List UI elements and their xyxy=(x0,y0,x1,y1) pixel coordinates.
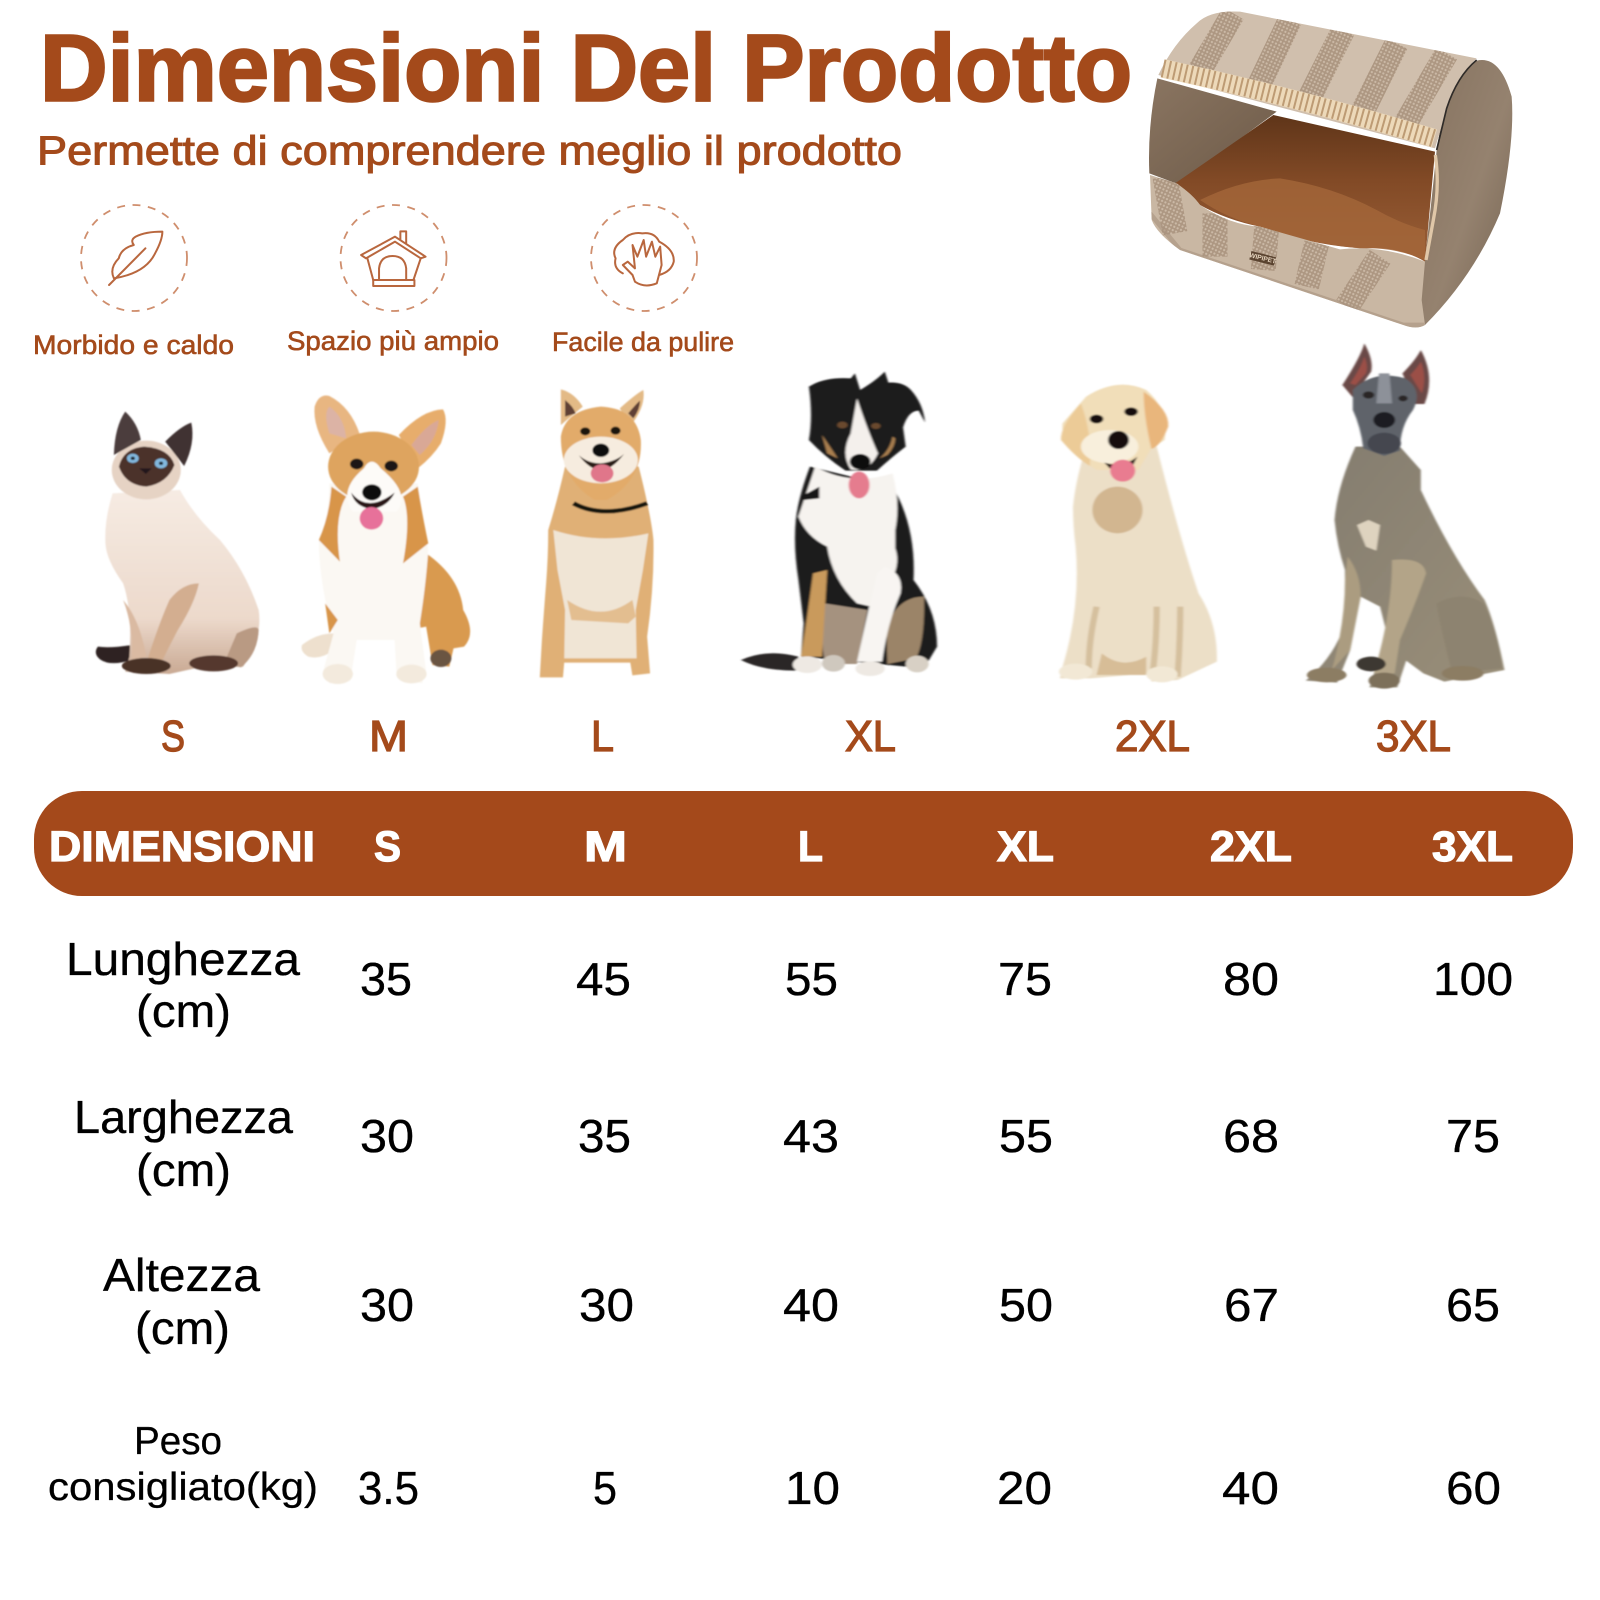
values: 20 xyxy=(997,1462,1052,1514)
size label 2XL: 2XL xyxy=(1115,712,1190,761)
header: M: M xyxy=(584,823,627,871)
bed cushion xyxy=(1175,115,1435,262)
icon: dashed circle xyxy=(340,205,446,311)
values xyxy=(358,1462,1501,1514)
values: 5 xyxy=(593,1462,617,1514)
values: 45 xyxy=(576,953,631,1005)
pet: great dane xyxy=(1306,343,1504,689)
table header xyxy=(34,791,1573,896)
bed piping xyxy=(1437,60,1477,150)
label: Morbido e caldo xyxy=(33,330,234,360)
pet: shiba inu xyxy=(540,389,654,677)
bed roof ribbed trim xyxy=(1163,68,1434,138)
icon: dashed circle xyxy=(591,205,697,311)
values: 55 xyxy=(999,1110,1053,1162)
values xyxy=(360,1279,1500,1331)
size label S: S xyxy=(161,712,185,761)
values: 55 xyxy=(785,953,838,1005)
bed cushion highlight xyxy=(1200,178,1425,260)
values: 68 xyxy=(1223,1110,1279,1162)
values: 35 xyxy=(360,953,412,1005)
icon: hand and foam xyxy=(614,233,674,285)
table row: lunghezza xyxy=(66,933,1513,1037)
row label: Larghezza xyxy=(74,1091,293,1143)
illustration: pets S M L xyxy=(96,389,654,684)
row label: Lunghezza xyxy=(66,933,300,985)
illustration: pet bed house xyxy=(1143,7,1512,333)
icon: leaf xyxy=(109,232,162,285)
feature: facile da pulire xyxy=(552,205,734,357)
bed front lip xyxy=(1150,175,1425,328)
header: L: L xyxy=(798,823,823,871)
header: dimensioni: DIMENSIONI xyxy=(49,823,315,871)
icon: dashed circle xyxy=(81,205,187,311)
values: 75 xyxy=(998,953,1052,1005)
subtitle: Permette di comprendere meglio il prodotto xyxy=(37,128,902,174)
row label: (cm) xyxy=(135,1302,230,1354)
header: XL: XL xyxy=(997,823,1054,871)
values: 43 xyxy=(783,1110,839,1162)
title: Dimensioni Del Prodotto xyxy=(40,16,1132,122)
icon: dog house xyxy=(361,231,426,286)
values: 35 xyxy=(578,1110,631,1162)
values: 65 xyxy=(1446,1279,1500,1331)
size label M: M xyxy=(369,712,408,761)
illustration: pets XL 2XL 3XL xyxy=(741,343,1504,689)
pet: golden retriever xyxy=(1059,385,1217,682)
values: 100 xyxy=(1433,953,1513,1005)
values: 40 xyxy=(1222,1462,1279,1514)
values: 10 xyxy=(785,1462,840,1514)
label: Facile da pulire xyxy=(552,327,734,357)
values: 30 xyxy=(579,1279,634,1331)
table row: peso consigliato xyxy=(48,1420,1501,1514)
bed side panel xyxy=(1420,60,1512,325)
row label: Peso xyxy=(134,1420,222,1463)
header: 2XL: 2XL xyxy=(1210,823,1292,871)
bed roof xyxy=(1157,7,1483,153)
row label: consigliato(kg) xyxy=(48,1466,318,1509)
values: 80 xyxy=(1223,953,1279,1005)
feature: spazio più ampio xyxy=(287,205,499,356)
feature: morbido e caldo xyxy=(33,205,234,360)
values: 30 xyxy=(360,1110,414,1162)
values xyxy=(360,1110,1500,1162)
bed interior wall xyxy=(1149,78,1277,183)
values: 30 xyxy=(360,1279,414,1331)
size label 3XL: 3XL xyxy=(1376,712,1451,761)
row label: (cm) xyxy=(136,1144,231,1196)
pet: corgi xyxy=(302,396,470,684)
table row: larghezza xyxy=(74,1091,1500,1196)
bed brand label: WIPIPET xyxy=(1248,252,1277,266)
values: 60 xyxy=(1446,1462,1501,1514)
values: 40 xyxy=(783,1279,839,1331)
pet: border collie xyxy=(741,372,937,676)
values: 67 xyxy=(1224,1279,1279,1331)
header: 3XL: 3XL xyxy=(1432,823,1513,871)
values: 75 xyxy=(1446,1110,1500,1162)
row label: (cm) xyxy=(136,985,231,1037)
header: S: S xyxy=(374,823,401,871)
values: 50 xyxy=(999,1279,1053,1331)
pet: siamese cat xyxy=(96,412,259,674)
table row: altezza xyxy=(103,1249,1500,1354)
values xyxy=(360,953,1513,1005)
row label: Altezza xyxy=(103,1249,260,1301)
size labels xyxy=(161,712,1451,761)
header pill xyxy=(34,791,1573,896)
values: 3.5 xyxy=(358,1462,419,1514)
size label L: L xyxy=(591,712,614,761)
size label XL: XL xyxy=(845,712,896,761)
bed inner edge xyxy=(1426,155,1437,260)
label: Spazio più ampio xyxy=(287,326,499,356)
